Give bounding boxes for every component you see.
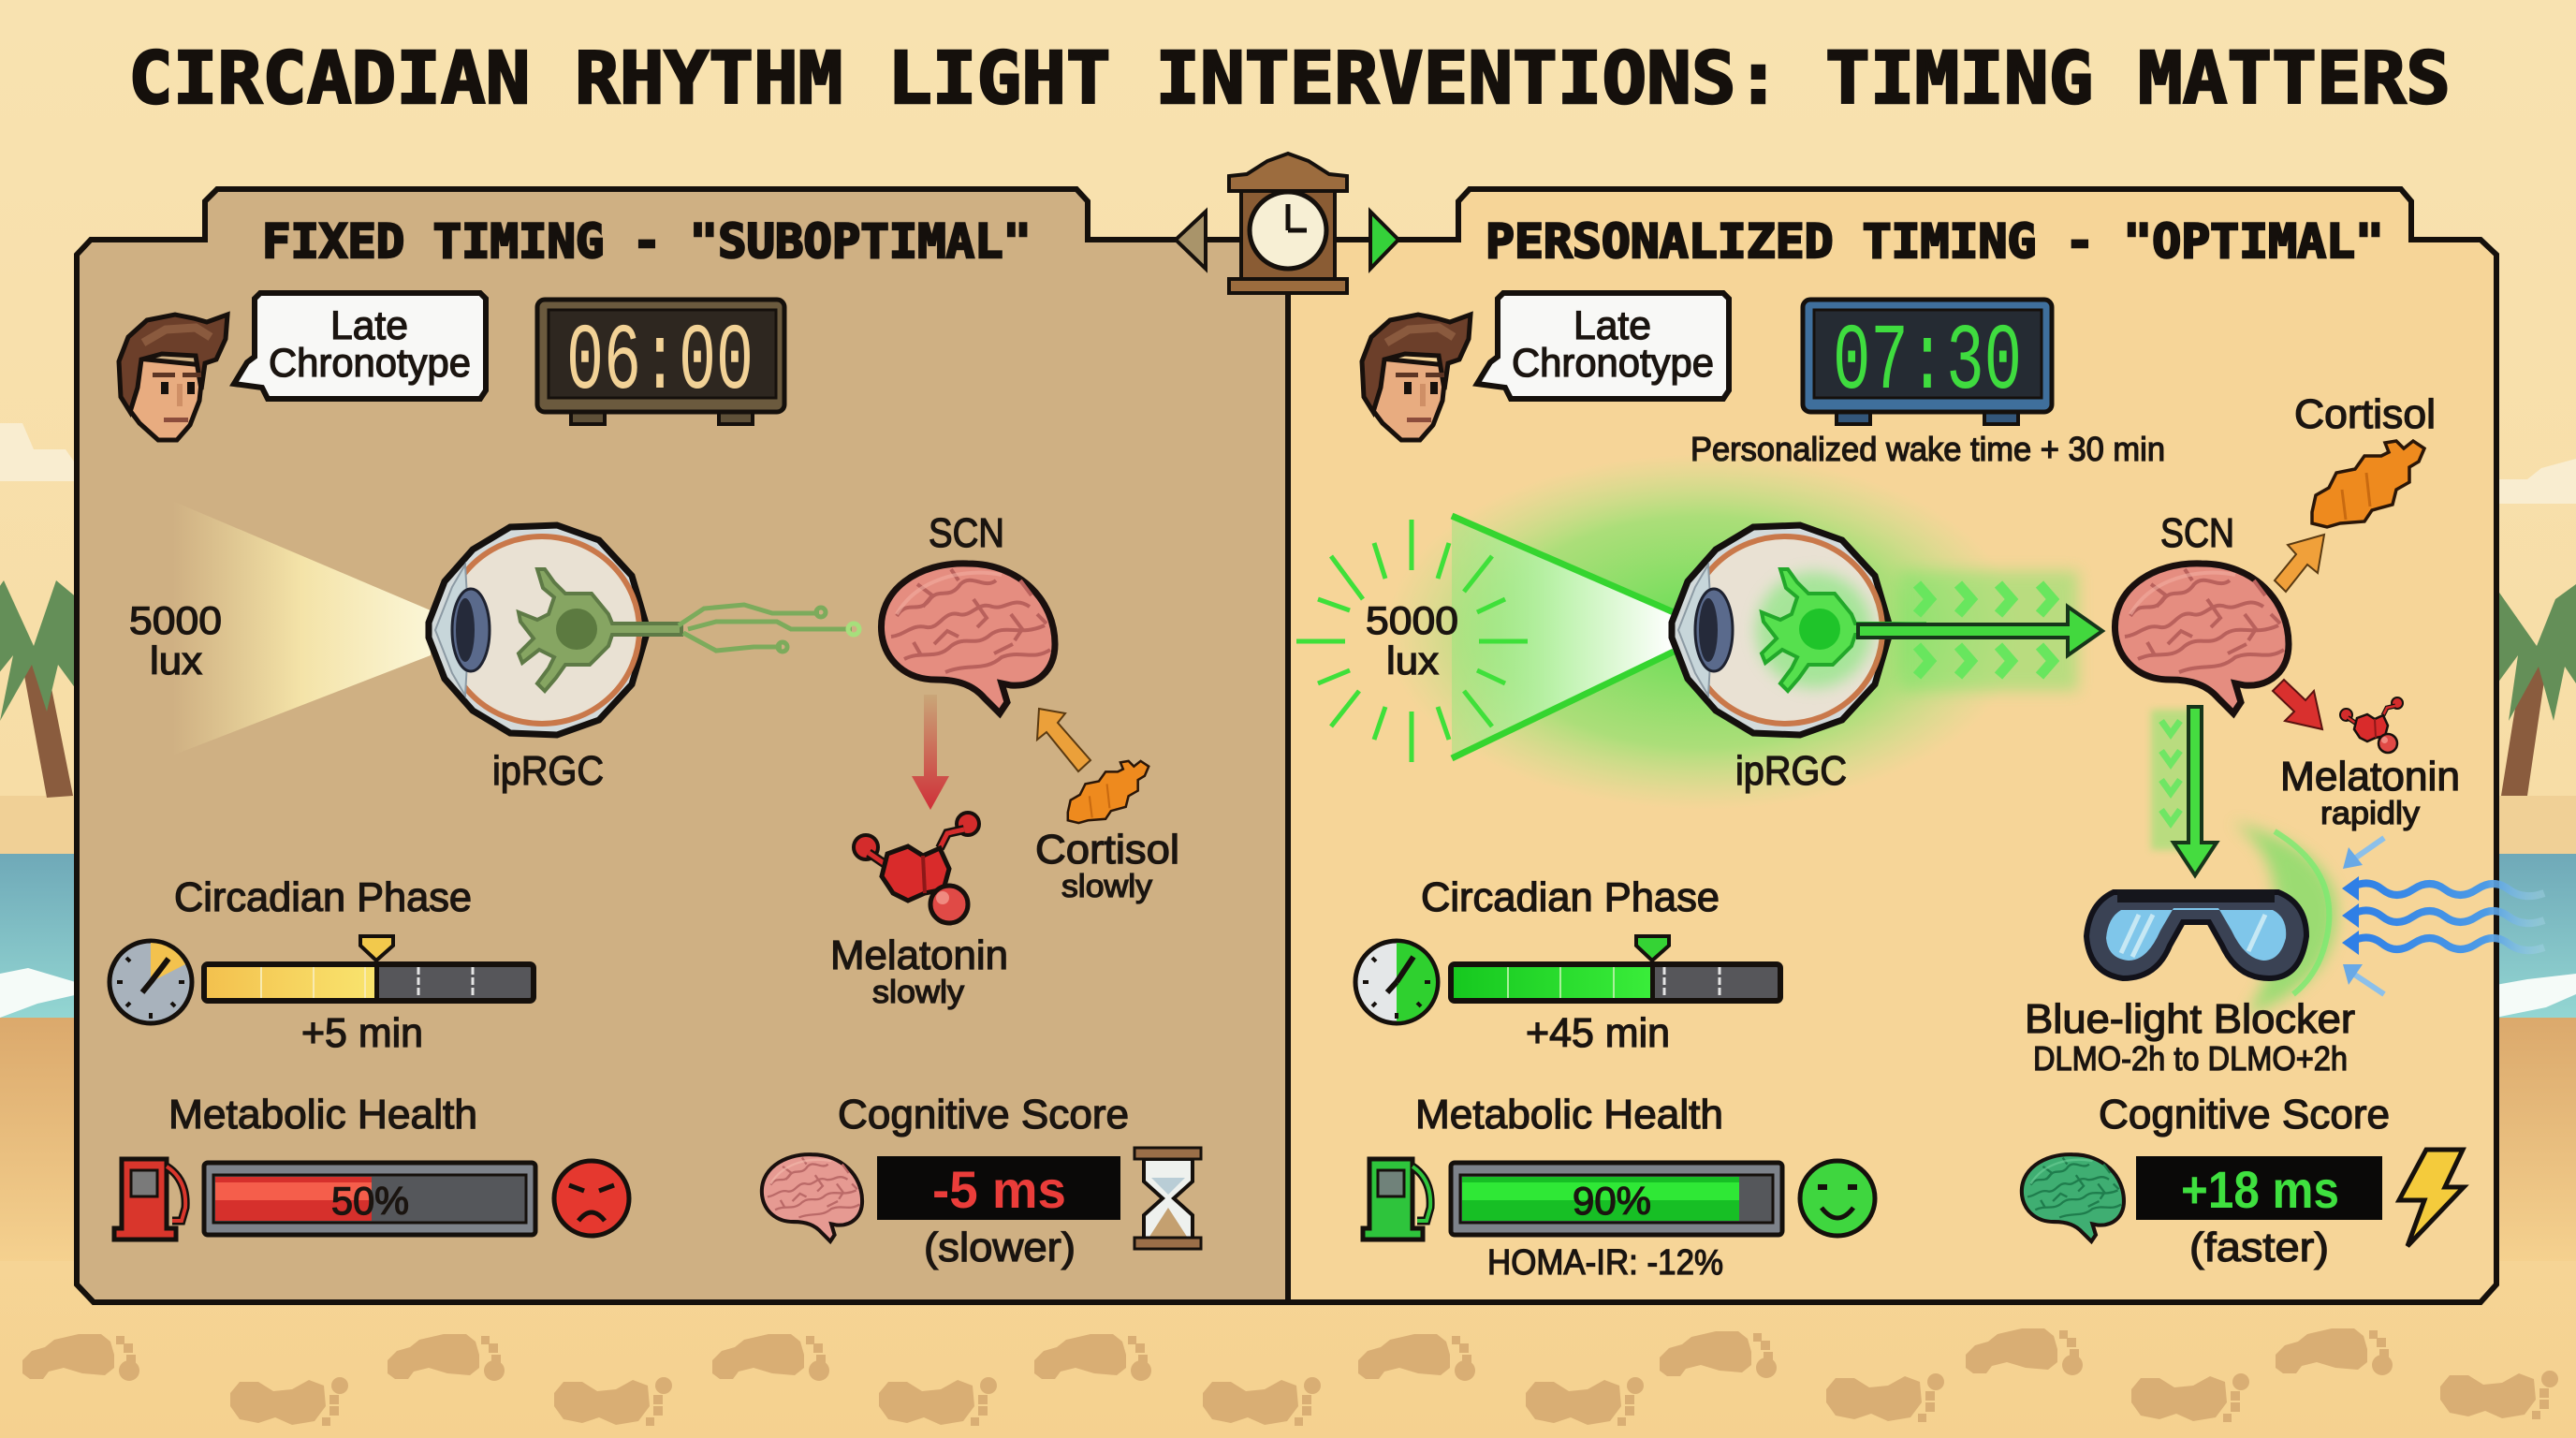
label blue-light blocker: DLMO-2h to DLMO+2h [2033, 1039, 2348, 1078]
speech bubble: Late [330, 303, 408, 348]
icon: green brain [2022, 1154, 2124, 1241]
icon: hourglass [1134, 1148, 1201, 1249]
speech bubble: Late [1573, 303, 1651, 348]
score box [2136, 1156, 2382, 1220]
phase marker [1636, 936, 1669, 961]
speech bubble [1477, 293, 1729, 399]
eye with activated ipRGC [1672, 525, 1925, 735]
value 50%: 50% [331, 1179, 409, 1223]
heading: cognitive score: Cognitive Score [838, 1092, 1129, 1137]
score box: +18 ms [2181, 1160, 2339, 1219]
value 90%: 90% [1573, 1179, 1651, 1223]
arrow: down to melatonin [912, 695, 949, 810]
eye with ipRGC [429, 525, 681, 735]
cloud left [0, 423, 79, 481]
connector: personalized side [1348, 212, 1398, 269]
shield: blue-light filter [2232, 822, 2336, 1016]
brain SCN [2115, 564, 2289, 713]
avatar: late chronotype [119, 315, 227, 440]
central grandfather clock [1229, 154, 1347, 293]
molecule: melatonin [854, 813, 979, 923]
arrow: cortisol to brain [1037, 709, 1090, 771]
score note: (slower) [924, 1225, 1076, 1270]
alarm clock 06:00 [537, 300, 784, 424]
label melatonin rapidly: Melatonin [2280, 754, 2460, 800]
alarm clock 06:00: 06:00 [566, 311, 754, 417]
icon: phase clock [1355, 941, 1438, 1023]
light level [129, 598, 222, 682]
avatar: late chronotype [1362, 315, 1471, 440]
light cone [172, 501, 431, 756]
label blue-light blocker: Blue-light Blocker [2025, 996, 2355, 1042]
cloud right [2496, 459, 2576, 504]
icon: phase clock [110, 941, 192, 1023]
heading: cognitive score: Cognitive Score [2099, 1092, 2390, 1137]
metabolic bar [204, 1163, 535, 1235]
alarm clock 07:30 [1803, 300, 2052, 424]
phase marker [360, 936, 393, 961]
light level: lux [150, 638, 202, 682]
icon: lightning bolt [2399, 1150, 2464, 1246]
label SCN: SCN [2160, 510, 2234, 556]
molecule: cortisol [1068, 761, 1149, 823]
connector: fixed side [1176, 212, 1228, 269]
icon: blue-light blocking goggles [2086, 889, 2306, 978]
label blue-light blocker [2025, 996, 2355, 1078]
speech bubble [234, 293, 486, 399]
light rays [1296, 520, 1528, 762]
heading: circadian phase: Circadian Phase [1421, 874, 1720, 920]
arrow: brain to melatonin [2273, 680, 2322, 729]
label melatonin rapidly [2280, 754, 2460, 831]
light level: lux [1386, 638, 1439, 682]
weak signal branches [679, 605, 859, 652]
light level [1366, 598, 1458, 682]
wake time note: Personalized wake time + 30 min [1690, 430, 2165, 468]
alarm clock 07:30: 07:30 [1833, 311, 2022, 417]
signal arrow [1858, 571, 2102, 691]
title: CIRCADIAN RHYTHM LIGHT INTERVENTIONS: TIMING MATTERS [128, 37, 2451, 121]
icon: brain [762, 1154, 862, 1241]
footprints in the sand [22, 1328, 2558, 1426]
score box [877, 1156, 1120, 1220]
phase bar [204, 964, 534, 1001]
heading: circadian phase: Circadian Phase [174, 874, 472, 920]
light level: 5000 [1366, 598, 1458, 642]
heading: personalized timing: PERSONALIZED TIMING - "OPTIMAL" [1486, 214, 2384, 269]
label ipRGC: ipRGC [492, 748, 604, 794]
panel: personalized timing [1288, 189, 2544, 1302]
arrow: brain to cortisol [2275, 535, 2324, 592]
heading: metabolic health: Metabolic Health [1415, 1092, 1723, 1137]
signal chevrons [1917, 584, 2053, 676]
icon: happy face [1800, 1161, 1875, 1236]
label cortisol slowly: Cortisol [1035, 827, 1179, 873]
label cortisol: Cortisol [2294, 391, 2436, 437]
label ipRGC: ipRGC [1735, 748, 1847, 794]
label cortisol slowly [1035, 827, 1179, 904]
icon: fuel pump [1363, 1159, 1430, 1240]
metabolic bar [1451, 1163, 1782, 1235]
score note: (faster) [2189, 1225, 2329, 1270]
label cortisol slowly: slowly [1061, 869, 1152, 904]
chevrons [2161, 721, 2180, 823]
label melatonin slowly: Melatonin [830, 932, 1008, 978]
phase value: +45 min [1526, 1010, 1670, 1056]
icon: sad face [554, 1161, 629, 1236]
green glow [1385, 454, 2022, 810]
molecule: cortisol [2312, 441, 2424, 527]
palm right [2497, 584, 2576, 796]
speech bubble: Chronotype [269, 341, 471, 386]
blue light waves [2342, 838, 2544, 994]
icon: fuel pump [114, 1159, 185, 1240]
light level: 5000 [129, 598, 222, 642]
label melatonin rapidly: rapidly [2320, 796, 2420, 831]
phase bar [1451, 964, 1780, 1001]
label melatonin slowly: slowly [872, 975, 964, 1010]
heading: fixed timing: FIXED TIMING - "SUBOPTIMAL" [262, 214, 1032, 269]
palm left [0, 580, 79, 798]
HOMA-IR note: HOMA-IR: -12% [1487, 1243, 1723, 1283]
heading: metabolic health: Metabolic Health [168, 1092, 477, 1137]
label SCN: SCN [929, 510, 1004, 556]
label melatonin slowly [830, 932, 1008, 1010]
brain SCN [881, 564, 1055, 713]
light cone [1452, 516, 1674, 758]
phase value: +5 min [301, 1010, 423, 1056]
panel: fixed timing [77, 189, 1288, 1302]
score box: -5 ms [932, 1160, 1066, 1219]
arrow: down to blue-light blocker [2151, 707, 2217, 875]
molecule: melatonin [2340, 697, 2403, 753]
speech bubble: Chronotype [1512, 341, 1714, 386]
